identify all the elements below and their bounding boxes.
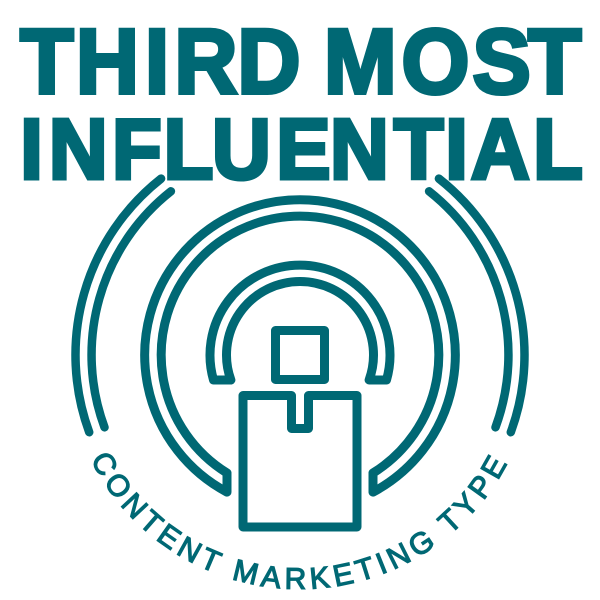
right outer arc [439, 179, 525, 432]
title line 1: THIRD MOST [20, 11, 581, 114]
curved caption: CONTENT MARKETING TYPE [94, 453, 508, 590]
box with notch [243, 396, 357, 527]
title line 2: INFLUENTIAL [20, 101, 583, 197]
title [20, 11, 583, 197]
right inner arc [429, 191, 508, 427]
large ring [145, 200, 455, 492]
left inner arc [92, 191, 171, 427]
small ring [210, 265, 390, 380]
icon: broadcast signal box [75, 179, 525, 527]
left outer arc [75, 179, 161, 432]
square [276, 330, 324, 380]
